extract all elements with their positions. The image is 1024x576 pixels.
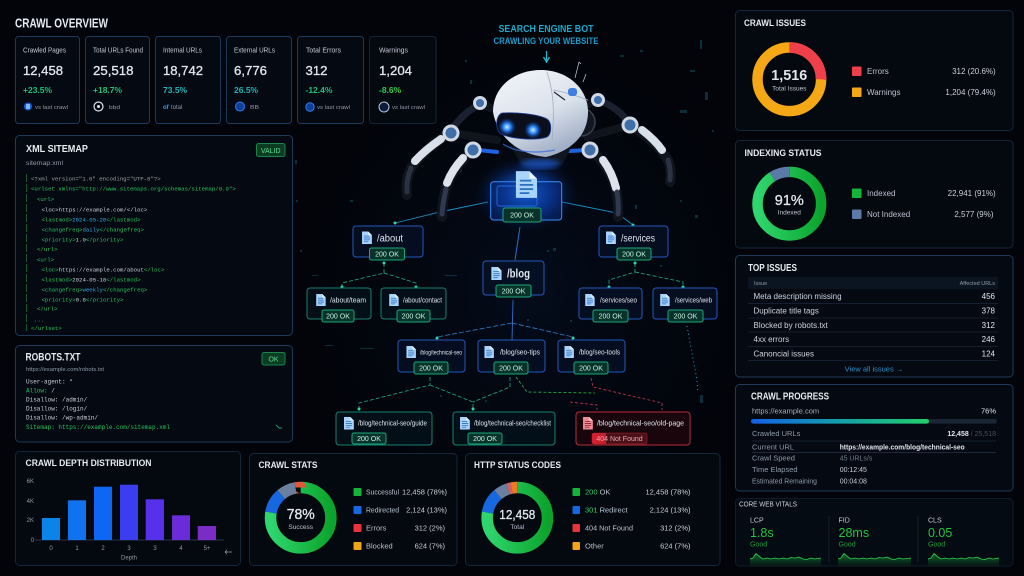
legend: crawl stats: 2,124 (13%) [406,506,448,514]
node: guide: /blog/technical-seo/guide [358,420,427,428]
progress bar [751,419,997,424]
panel: crawl progress: 76% [981,406,996,416]
legend: crawl stats: Errors [366,524,387,532]
panel: crawl stats [250,454,457,566]
code block: sitemap xml: <urlset xmlns="http://www.sitemaps.org/schemas/sitemap/0.9"> [31,185,236,192]
node: services/web [653,288,717,322]
legend: crawl stats: Successful [366,488,399,496]
table: top issues: 312 [982,321,996,330]
stat card: total urls found: +18.7% [93,85,123,95]
table: top issues: 246 [982,335,996,344]
stat card: total errors: 312 [306,63,328,78]
heading: CRAWL DEPTH DISTRIBUTION [26,458,152,469]
table: top issues: Duplicate title tags [754,306,819,316]
robot side pod [567,108,595,136]
panel: indexing status [736,140,1013,248]
node: blog [483,261,544,297]
title: crawl overview: CRAWL OVERVIEW [15,16,108,30]
legend: http status: 12,458 (78%) [645,488,691,496]
code block: sitemap xml: <changefreq>daily</changefreq> [42,226,145,233]
metric: fid: FID [838,518,850,524]
crawl details: https://example.com/blog/technical-seo [840,444,965,452]
panel: xml sitemap [16,136,292,336]
robot legs [406,100,671,217]
stat card: internal urls: 18,742 [163,63,203,78]
stat card: crawled pages: +23.5% [23,85,53,95]
heading: CRAWL STATS [258,460,318,471]
stat card: total errors: -12.4% [306,85,333,95]
node: blog: 200 OK [502,288,526,296]
panel: crawl progress [736,384,1013,491]
code block: sitemap xml: <lastmod>2024-05-20</lastmod> [42,216,141,223]
legend: crawl issues: 312 (20.6%) [952,67,996,76]
crawl details: Time Elapsed [752,465,798,474]
table: top issues: 456 [982,292,996,301]
heading: CRAWL PROGRESS [751,390,829,402]
code block: robots rules: Allow: / [26,388,55,395]
node: about/team: 200 OK [326,314,350,320]
node: about/team [307,288,371,322]
legend: indexing: Not Indexed [867,210,910,219]
badge: ok [262,352,285,365]
node: services/seo [579,288,642,322]
code block: sitemap xml: <priority>1.0</priority> [42,236,124,243]
badge: valid: VALID [261,148,281,155]
node: about/contact [381,288,446,322]
donut chart: http status: 12,458 [499,508,535,522]
node: checklist: /blog/technical-seo/checklist [474,420,551,428]
crawl details [752,429,996,486]
heading: TOP ISSUES [748,263,797,274]
bar chart: depth: 0 [49,546,53,552]
legend: http status: 301 Redirect [585,506,628,514]
code block: sitemap xml: <lastmod>2024-05-18</lastmod> [42,276,141,283]
legend: crawl stats: Redirected [366,506,399,514]
robot eyes [498,118,542,139]
stat card: warnings [370,36,436,124]
stat card: total urls found [86,36,150,124]
link: view all issues: View all issues → [845,364,903,374]
node: old page 404: /blog/technical-seo/old-page [597,420,684,428]
heading: search engine bot: CRAWLING YOUR WEBSITE [494,36,598,46]
code block: sitemap xml: <url> [37,196,55,203]
legend: crawl stats: 624 (7%) [415,542,445,550]
stat card: warnings: 1,204 [379,63,412,78]
node: services/web: /services/web [675,298,712,304]
node: blog/seo-tips: 200 OK [499,366,523,372]
code block: robots rules: User-agent: * [26,379,73,386]
legend: crawl issues [852,66,996,97]
bar chart: depth: 6K [27,479,34,485]
code block: sitemap xml: </url> [37,246,58,253]
node: about: /about [377,234,403,244]
node: services: 200 OK [622,252,646,258]
robot joints [444,94,637,157]
legend: http status: 404 Not Found [585,524,633,532]
stat card: external urls: External URLs [234,46,275,54]
table: top issues: 124 [982,350,996,358]
code block: sitemap xml: <url> [37,256,55,263]
legend: crawl issues: Warnings [867,88,900,97]
node: checklist: 200 OK [473,436,497,443]
bar chart: depth: 2K [27,518,34,524]
robot: spider bot [406,62,671,217]
donut chart: crawl issues: 1,516 [771,68,807,84]
stat card: warnings: Warnings [379,46,408,54]
bar chart: depth: 2 [101,546,105,552]
bar chart: depth: 4K [27,499,34,505]
stat card: external urls: BB [250,105,259,111]
metric: fid [838,518,911,567]
node: about/contact: /about/contact [403,298,442,304]
node: checklist [453,412,555,445]
code block: robots rules: Disallow: /wp-admin/ [26,415,98,422]
table: top issues: Blocked by robots.txt [754,321,829,330]
donut chart: http status [487,488,548,548]
donut chart: indexing [758,172,821,235]
code block: sitemap xml: </urlset> [31,325,62,332]
code block: sitemap xml: </url> [37,306,58,313]
legend: crawl stats [354,488,448,550]
legend: crawl issues: Errors [867,67,889,76]
metric: lcp [750,518,821,567]
legend: indexing: Indexed [867,189,895,198]
node: blog: /blog [507,266,530,280]
node: about [353,226,423,260]
legend: http status: 2,124 (13%) [650,506,691,514]
panel: crawl depth distribution [16,452,240,566]
legend: crawl stats: Blocked [366,542,393,550]
node: about/team: /about/team [330,298,366,304]
crawl details: 12,458 / 25,518 [947,431,996,438]
crawl details: 00:04:08 [840,478,867,486]
bar chart: depth: Depth [121,556,137,562]
donut chart: http status: Total [510,524,525,531]
bar chart: depth: 0 [31,538,35,544]
table: top issues: 378 [982,306,996,316]
crawl details: Crawl Speed [752,454,795,462]
table: top issues: Issue [754,281,767,287]
legend: crawl stats: 12,458 (78%) [402,488,448,496]
stat card: internal urls [156,36,220,124]
node: blog/seo-tips [478,340,545,374]
legend: crawl stats: 312 (2%) [415,524,445,532]
stat card: total urls found: bbd [109,105,120,111]
metric: cls [928,518,999,567]
code block: sitemap xml: <priority>0.8</priority> [42,296,124,303]
node: blog/seo-tools: /blog/seo-tools [579,350,620,356]
node: about: 200 OK [375,252,399,258]
metric: lcp: Good [750,542,767,548]
panel: crawl progress: https://example.com [752,406,819,416]
heading: search engine bot [494,24,598,46]
metric: lcp: 1.8s [750,526,774,540]
panel: xml sitemap: sitemap.xml [26,160,64,167]
panel: robots.txt [16,346,292,442]
stat card: external urls [226,36,292,124]
node: blog/technical-seo: /blog/technical-seo [420,350,463,356]
code block: sitemap xml: <loc>https://example.com/about</loc> [42,266,165,273]
node: guide [336,412,432,445]
bar chart: depth: 3 [153,546,157,552]
code block: sitemap xml [31,175,236,332]
bar chart: depth: 1 [75,546,79,552]
badge: valid [256,144,285,156]
crawl details: 00:12:45 [840,467,867,474]
panel: crawl issues [736,10,1013,130]
donut chart: crawl stats: 78% [287,506,315,523]
stat card: internal urls: total [171,105,182,111]
site tree connectors [340,202,698,410]
metric: cls: CLS [928,518,942,524]
donut chart: indexing: Indexed [778,210,801,216]
stat card: crawled pages: vs last crawl [35,105,68,111]
node: services: /services [621,234,655,244]
stat card: warnings: -8.6% [379,85,402,95]
code block: robots rules: Disallow: /login/ [26,406,88,413]
legend: http status: 624 (7%) [660,542,691,550]
legend: http status: Other [585,542,604,550]
stat card: external urls: 26.5% [234,85,259,95]
metric: cls: 0.05 [928,526,952,540]
node: services/web: 200 OK [674,314,698,320]
node: old page 404: 404 Not Found [596,436,643,443]
arrow: bot pointer [544,51,550,63]
node: services/seo: /services/seo [600,298,637,304]
stat card: internal urls: of [163,105,170,111]
crawl details: Current URL [752,442,794,452]
node: blog/technical-seo [398,340,465,374]
node: blog/seo-tips: /blog/seo-tips [500,350,540,356]
code block: sitemap xml: ... [34,316,44,323]
node: old page 404 [576,412,690,445]
metric: cls: Good [928,542,945,548]
node: root page [470,154,582,234]
panel: top issues [736,256,1013,377]
panel: http status codes [466,454,720,566]
stat card: total errors: Total Errors [306,46,341,54]
heading: search engine bot: SEARCH ENGINE BOT [498,24,594,35]
heading: HTTP STATUS CODES [474,460,561,471]
panel: core web vitals [736,498,1013,567]
legend: http status: 312 (2%) [660,524,691,532]
code block: robots rules: Disallow: /admin/ [26,397,88,404]
table: top issues: Meta description missing [754,292,842,301]
stat card: total urls found: 25,518 [93,63,134,78]
node: blog/seo-tools [558,340,625,374]
legend: indexing: 22,941 (91%) [948,189,996,198]
metric: fid: Good [838,542,856,548]
stat card: total errors: vs last crawl [317,105,350,111]
stat card: crawled pages: Crawled Pages [23,46,66,54]
code block: sitemap xml: <loc>https://example.com/</loc> [42,206,148,213]
crawl details: Crawled URLs [752,429,801,438]
crawl details: Estimated Remaining [752,476,817,486]
code block: robots rules: Sitemap: https://example.com/sitemap.xml [26,424,170,431]
code block: sitemap xml: <?xml version="1.0" encoding="UTF-8"?> [31,175,161,182]
stat card: crawled pages [16,36,80,124]
table: top issues: Affected URLs [960,281,995,287]
metric: lcp: LCP [750,518,764,524]
legend: http status: 200 OK [585,488,610,496]
donut chart: crawl issues [758,48,821,111]
bar chart: depth: 5+ [204,546,211,552]
heading: xml sitemap: XML SITEMAP [26,143,88,155]
table: top issues: Canoncial issues [754,350,814,358]
robot visor [497,113,551,139]
node: about/contact: 200 OK [402,314,426,320]
bar chart: depth: 4 [179,546,183,552]
stat card: total urls found: Total URLs Found [93,46,143,54]
stat card: warnings: vs last crawl [392,105,425,111]
panel: robots.txt: https://example.com/robots.txt [26,367,104,373]
code block: sitemap xml: <changefreq>weekly</changefreq> [42,286,148,293]
node: blog/seo-tools: 200 OK [579,366,603,372]
node: guide: 200 OK [357,436,381,443]
node: blog/technical-seo: 200 OK [419,366,443,372]
stat card: crawled pages: 12,458 [23,63,63,78]
bar chart: depth [27,479,232,562]
badge: ok: OK [268,356,279,364]
legend: indexing [852,188,996,219]
heading: INDEXING STATUS [744,148,822,159]
crawl details: 45 URLs/s [840,456,873,462]
node: services [599,226,668,260]
legend: crawl issues: 1,204 (79.4%) [945,88,996,97]
node: root page: 200 OK [510,212,534,220]
stat card: total errors [298,36,364,124]
robot body underside [510,146,572,165]
legend: http status [572,488,691,550]
heading: CRAWL ISSUES [744,18,806,29]
donut chart: crawl stats [270,488,331,548]
stat card: internal urls: 73.5% [163,85,188,95]
stat card: internal urls: Internal URLs [163,46,202,54]
node: services/seo: 200 OK [599,314,623,320]
donut chart: crawl stats: Success [288,524,314,531]
heading: CORE WEB VITALS [739,502,797,508]
donut chart: crawl issues: Total Issues [772,86,807,92]
bar chart: depth: 3 [127,546,131,552]
table: top issues [748,277,998,360]
robot head [493,70,588,157]
legend: indexing: 2,577 (9%) [954,210,994,219]
heading: robots.txt: ROBOTS.TXT [26,352,81,364]
metric: fid: 28ms [838,526,869,540]
table: top issues: 4xx errors [754,335,789,344]
stat card: external urls: 6,776 [234,63,267,78]
code block: robots rules [26,379,170,431]
donut chart: indexing: 91% [775,192,804,209]
